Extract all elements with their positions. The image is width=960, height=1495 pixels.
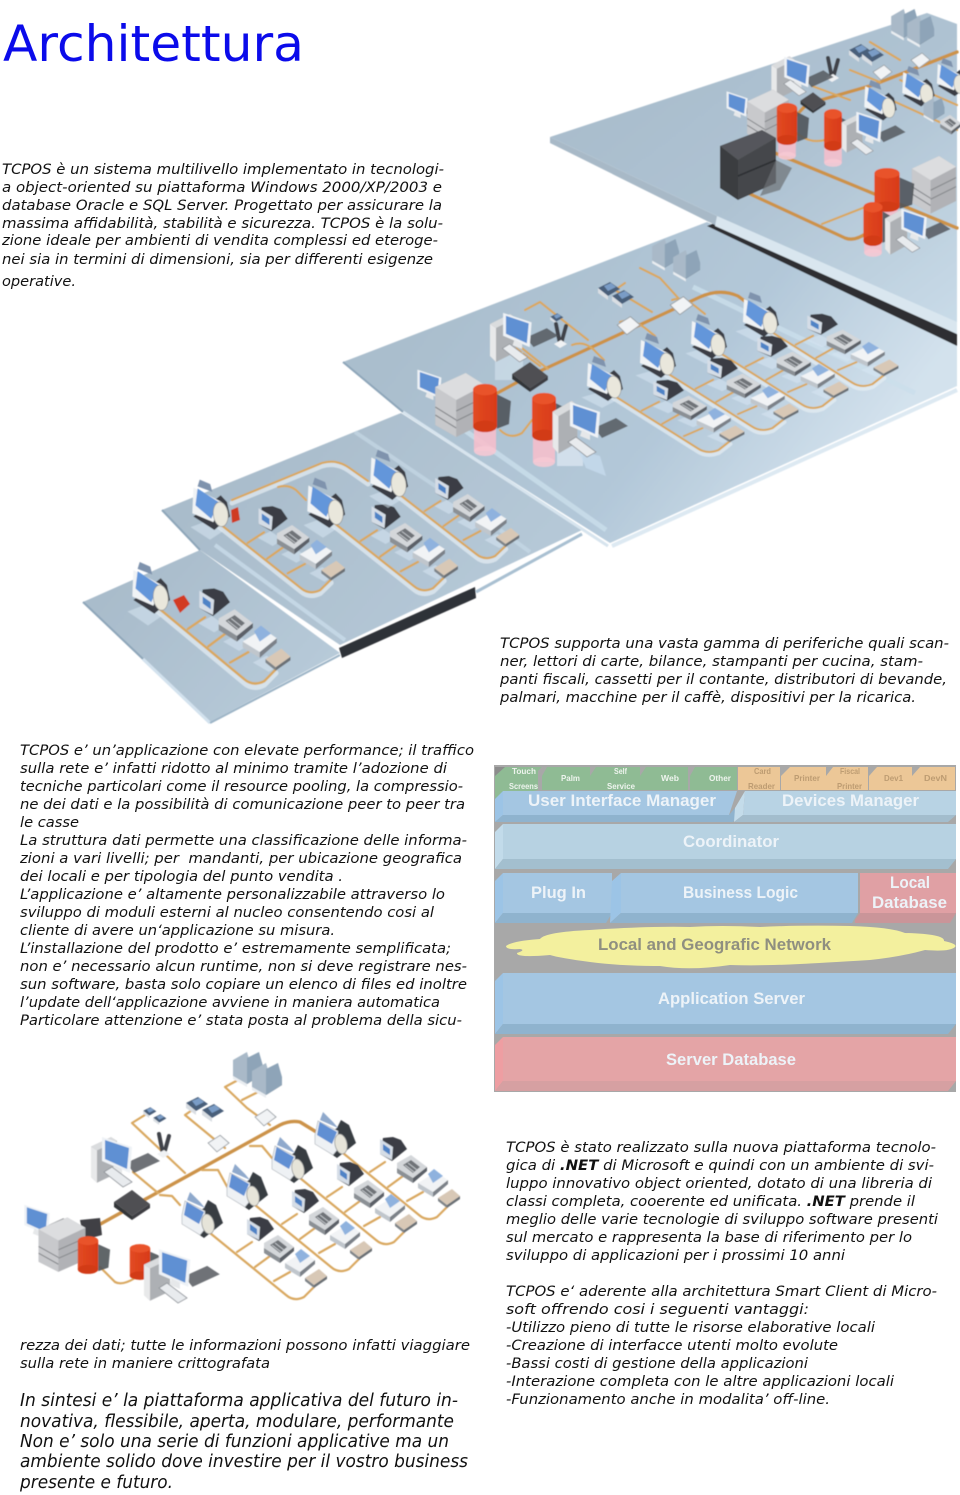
text block: security continued: sulla rete in maniere crittografata	[20, 1356, 270, 1372]
text block: .NET platform	[506, 1140, 938, 1264]
hubs	[208, 1135, 229, 1152]
tabs: user interface devices	[495, 766, 737, 800]
tabs: user interface devices: Palm	[561, 773, 580, 783]
network wires	[95, 1080, 318, 1283]
text block: summary: ambiente solido dove investire per il vostro business	[20, 1451, 468, 1472]
head office devices	[891, 9, 918, 40]
text block: performance: non e’ necessario alcun runtime, non si deve registrare nes-	[20, 959, 467, 975]
tabs: peripheral devices: Card	[754, 766, 771, 776]
text block: introduction	[1, 162, 444, 290]
text block: introduction: TCPOS è un sistema multilivello implementato in tecnologi-	[2, 162, 444, 178]
text block: introduction: a object-oriented su piattaforma Windows 2000/XP/2003 e	[2, 180, 442, 196]
layer: Plug In	[495, 873, 612, 923]
layer: Devices Manager: Devices Manager	[782, 791, 919, 810]
text block: Smart Client: soft offrendo cosi i seguenti vantaggi:	[506, 1302, 809, 1318]
text block: Smart Client: -Bassi costi di gestione della applicazioni	[506, 1356, 808, 1372]
layer: Local Database	[855, 873, 956, 923]
text block: performance: Particolare attenzione e’ stata posta al problema della sicu-	[20, 1013, 462, 1029]
text block: security continued	[20, 1338, 470, 1372]
phone	[157, 1134, 170, 1158]
text block: peripherals: panti fiscali, cassetti per il contante, distributori di bevande,	[499, 672, 947, 688]
layer: Local Database: Database	[872, 893, 947, 912]
text block: peripherals: palmari, macchine per il caffè, dispositivi per la ricarica.	[499, 690, 916, 706]
text block: Smart Client: TCPOS e‘ aderente alla architettura Smart Client di Micro-	[506, 1284, 937, 1300]
tabs: peripheral devices	[738, 766, 955, 791]
layer: Server Database	[495, 1037, 956, 1091]
black server	[720, 130, 792, 200]
text block: .NET platform: TCPOS è stato realizzato sulla nuova piattaforma tecnolo-	[506, 1140, 936, 1156]
text block: .NET platform: meglio delle varie tecnologie di sviluppo software presenti	[506, 1212, 938, 1228]
platform: medium store	[162, 413, 582, 658]
client workstation	[130, 1244, 220, 1303]
text block: performance: l’update dell‘applicazione avviene in maniera automatica	[20, 995, 440, 1011]
layer: Coordinator	[495, 824, 956, 869]
tabs: user interface devices: Self	[614, 766, 627, 776]
cloud: network	[506, 926, 956, 968]
tabs: peripheral devices: Printer	[794, 773, 821, 783]
workstation upper	[91, 1137, 160, 1187]
POS rows	[315, 1112, 460, 1219]
text block: performance: ne dei dati e la possibilità di comunicazione peer to peer tra	[20, 797, 465, 813]
text block: summary	[19, 1390, 468, 1493]
text block: .NET platform: gica di .NET di Microsoft e quindi con un ambiente di svi-	[506, 1158, 934, 1174]
text block: performance: TCPOS e’ un’applicazione con elevate performance; il traffico	[20, 743, 474, 759]
layer: Server Database: Server Database	[666, 1050, 796, 1069]
architecture layer diagram	[494, 765, 956, 1092]
top servers	[233, 1052, 263, 1087]
main server	[24, 1205, 110, 1274]
text block: peripherals	[499, 636, 949, 706]
wires	[492, 292, 754, 396]
server and databases	[417, 370, 464, 400]
platform: head office top	[550, 9, 960, 346]
text block: Smart Client: -Funzionamento anche in modalita’ off-line.	[506, 1392, 830, 1408]
layer: Devices Manager	[734, 791, 956, 822]
layer: User Interface Manager	[495, 791, 737, 822]
wires	[790, 52, 957, 122]
layer: Coordinator: Coordinator	[683, 832, 779, 851]
layer: Application Server	[495, 973, 956, 1034]
layer: User Interface Manager: User Interface Manager	[528, 791, 716, 810]
text block: performance: tecniche particolari come il resource pooling, la compressio-	[20, 779, 463, 795]
platform: large store	[343, 222, 957, 546]
dark edge bar	[707, 221, 957, 346]
text block: summary: presente e futuro.	[19, 1472, 173, 1493]
text block: performance: L’installazione del prodotto e’ estremamente semplificata;	[20, 941, 451, 957]
light stripes	[450, 287, 915, 530]
layer: Plug In: Plug In	[531, 883, 586, 902]
text block: performance: sulla rete e’ infatti ridotto al minimo tramite l’adozione di	[20, 761, 447, 777]
text block: performance: sviluppo di moduli esterni al nucleo consentendo cosi al	[20, 905, 434, 921]
text block: introduction: nei sia in termini di dimensioni, sia per differenti esigenze	[2, 252, 433, 268]
text block: .NET platform: classi completa, cooerente ed unificata. .NET prende il	[506, 1194, 915, 1210]
cloud: network: Local and Geografic Network	[598, 935, 832, 954]
text block: security continued: rezza dei dati; tutte le informazioni possono infatti viaggiare	[20, 1338, 470, 1354]
text block: summary: In sintesi e’ la piattaforma applicativa del futuro in-	[20, 1390, 458, 1411]
tabs: peripheral devices: Reader	[748, 781, 776, 791]
text block: summary: novativa, flessibile, aperta, modulare, performante	[20, 1411, 454, 1432]
text block: introduction: massima affidabilità, stabilità e sicurezza. TCPOS è la solu-	[2, 216, 443, 232]
text block: performance: La struttura dati permette una classificazione delle informa-	[20, 833, 467, 849]
text block: summary: Non e’ solo una serie di funzioni applicative ma un	[20, 1431, 449, 1452]
layer: Application Server: Application Server	[658, 989, 805, 1008]
dark edge bar	[339, 587, 476, 658]
text block: peripherals: ner, lettori di carte, bilance, stampanti per cucina, stam-	[500, 654, 923, 670]
text block: performance: L’applicazione e’ altamente personalizzabile attraverso lo	[20, 887, 445, 903]
top servers	[652, 239, 679, 270]
text block: .NET platform: luppo innovativo object oriented, dotato di una libreria di	[506, 1176, 932, 1192]
text block: introduction: database Oracle e SQL Server. Progettato per assicurare la	[2, 198, 442, 214]
layer: Business Logic	[610, 873, 858, 923]
layer: Business Logic: Business Logic	[683, 883, 798, 902]
layer: Local Database: Local	[890, 873, 930, 892]
tabs: user interface devices: Web	[661, 773, 679, 783]
text block: performance: dei locali e per tipologia del punto vendita .	[20, 869, 343, 885]
handhelds	[186, 1097, 208, 1115]
router	[114, 1190, 150, 1220]
text block: introduction: operative.	[2, 274, 76, 290]
text block: performance: sun software, basta solo copiare un elenco di files ed inoltre	[20, 977, 467, 993]
text block: Smart Client: -Utilizzo pieno di tutte le risorse elaborative locali	[506, 1320, 875, 1336]
text block: .NET platform: sviluppo di applicazioni per i prossimi 10 anni	[506, 1248, 845, 1264]
text block: Smart Client: -Interazione completa con le altre applicazioni locali	[506, 1374, 894, 1390]
text block: performance: zioni a vari livelli; per mandanti, per ubicazione geografica	[19, 851, 462, 867]
text block: performance: le casse	[20, 815, 79, 831]
title: Architettura	[3, 15, 304, 73]
tabs: peripheral devices: Fiscal	[840, 766, 860, 776]
text block: introduction: zione ideale per ambienti di vendita complessi ed eteroge-	[1, 233, 438, 249]
palmari	[143, 1107, 156, 1118]
text block: Smart Client	[506, 1284, 937, 1408]
store network illustration: stacked platforms	[83, 9, 960, 723]
network diagram	[24, 1052, 460, 1303]
tabs: user interface devices: Service	[607, 781, 635, 791]
text block: peripherals: TCPOS supporta una vasta gamma di periferiche quali scan-	[500, 636, 949, 652]
tabs: peripheral devices: Printer	[837, 781, 863, 791]
text block: performance	[19, 743, 474, 1029]
text block: Smart Client: -Creazione di interfacce utenti molto evolute	[506, 1338, 838, 1354]
text block: performance: cliente di avere un‘applicazione su misura.	[20, 923, 335, 939]
tabs: user interface devices: Screens	[509, 781, 538, 791]
tabs: user interface devices: Touch	[512, 766, 536, 776]
platform: small store bottom	[83, 550, 340, 723]
tabs: peripheral devices: DevN	[924, 773, 947, 783]
tabs: user interface devices: Other	[709, 773, 732, 783]
diagram backing	[494, 765, 956, 1092]
light stripes	[215, 545, 345, 640]
tabs: peripheral devices: Dev1	[884, 773, 903, 783]
text block: .NET platform: sul mercato e rappresenta la base di riferimento per lo	[506, 1230, 912, 1246]
